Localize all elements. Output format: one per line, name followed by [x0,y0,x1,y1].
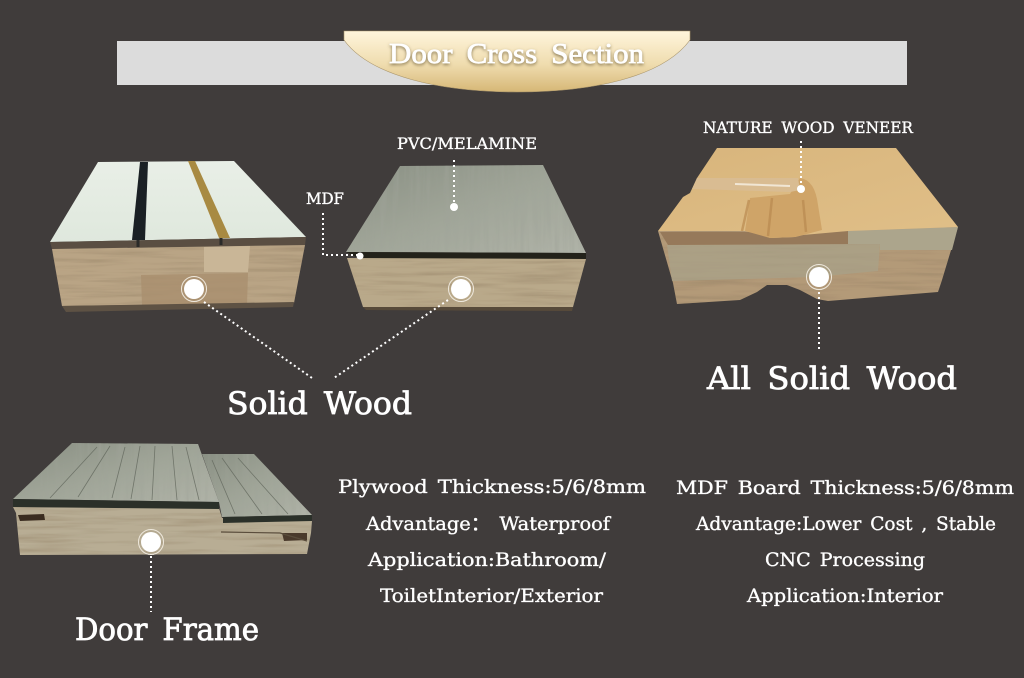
text block: plywood specs: ToiletInterior/Exterior [380,585,604,607]
right slot [282,533,307,541]
panel: solid wood door with PVC melamine surface [346,165,586,311]
callout: MDF: MDF [306,190,344,208]
grain strokes [50,446,288,514]
dark edge band [346,252,586,259]
bottom edge [363,307,573,311]
left slot [18,514,45,521]
grey right side [848,227,958,250]
bottom edge [62,302,294,312]
text block: plywood specs: Application:Bathroom/ [367,549,607,571]
MDF edge band [50,237,306,249]
callout: door frame [75,530,259,648]
text block: plywood specs [338,476,646,607]
shiny channel [692,178,800,192]
text block: MDF board specs: Application:Interior [746,585,944,607]
callout: door frame: Door Frame [75,612,259,648]
lower grey surface [202,454,312,517]
front profile [658,227,958,304]
text block: MDF board specs: CNC Processing [765,549,925,571]
panel: solid wood door with white laminate and inlay strips [50,161,306,312]
panel: door frame [13,443,312,555]
title banner: Door Cross Section [389,38,645,70]
black inlay strip [132,162,148,240]
callout: solid wood: Solid Wood [227,386,412,422]
text block: MDF board specs: Advantage:Lower Cost , Stable [695,513,996,535]
brown band [660,231,848,245]
title banner [117,31,907,92]
frame wood core [13,507,312,555]
callout: all solid wood [706,264,957,397]
gloss reflection [735,184,790,186]
rebate line [221,532,307,541]
joint marks [138,238,221,247]
panel: all solid wood door with veneer [658,148,958,304]
callout: all solid wood: All Solid Wood [706,361,957,397]
grey wood grain top face [346,165,586,253]
text block: MDF board specs [676,477,1014,607]
text block: plywood specs: Advantage： Waterproof [365,513,612,535]
grey band [667,244,880,281]
solid wood front [52,245,305,306]
callout: MDF [306,190,364,260]
solid wood front [347,258,586,307]
callout: nature wood veneer [703,118,914,193]
callout: solid wood [182,276,474,422]
upper dark band [13,499,219,509]
text block: plywood specs: Plywood Thickness:5/6/8mm [338,476,646,498]
gold inlay strip [188,161,230,238]
callout: nature wood veneer: NATURE WOOD VENEER [703,118,914,137]
upper grey surface [13,443,219,502]
routed groove [745,178,822,238]
callout: PVC melamine: PVC/MELAMINE [397,134,537,153]
groove shading [742,198,806,236]
veneer top face [658,148,958,238]
white laminate top face [50,161,306,242]
lower dark band [223,515,312,523]
callout: PVC melamine [397,134,537,211]
text block: MDF board specs: MDF Board Thickness:5/6/8mm [676,477,1014,499]
